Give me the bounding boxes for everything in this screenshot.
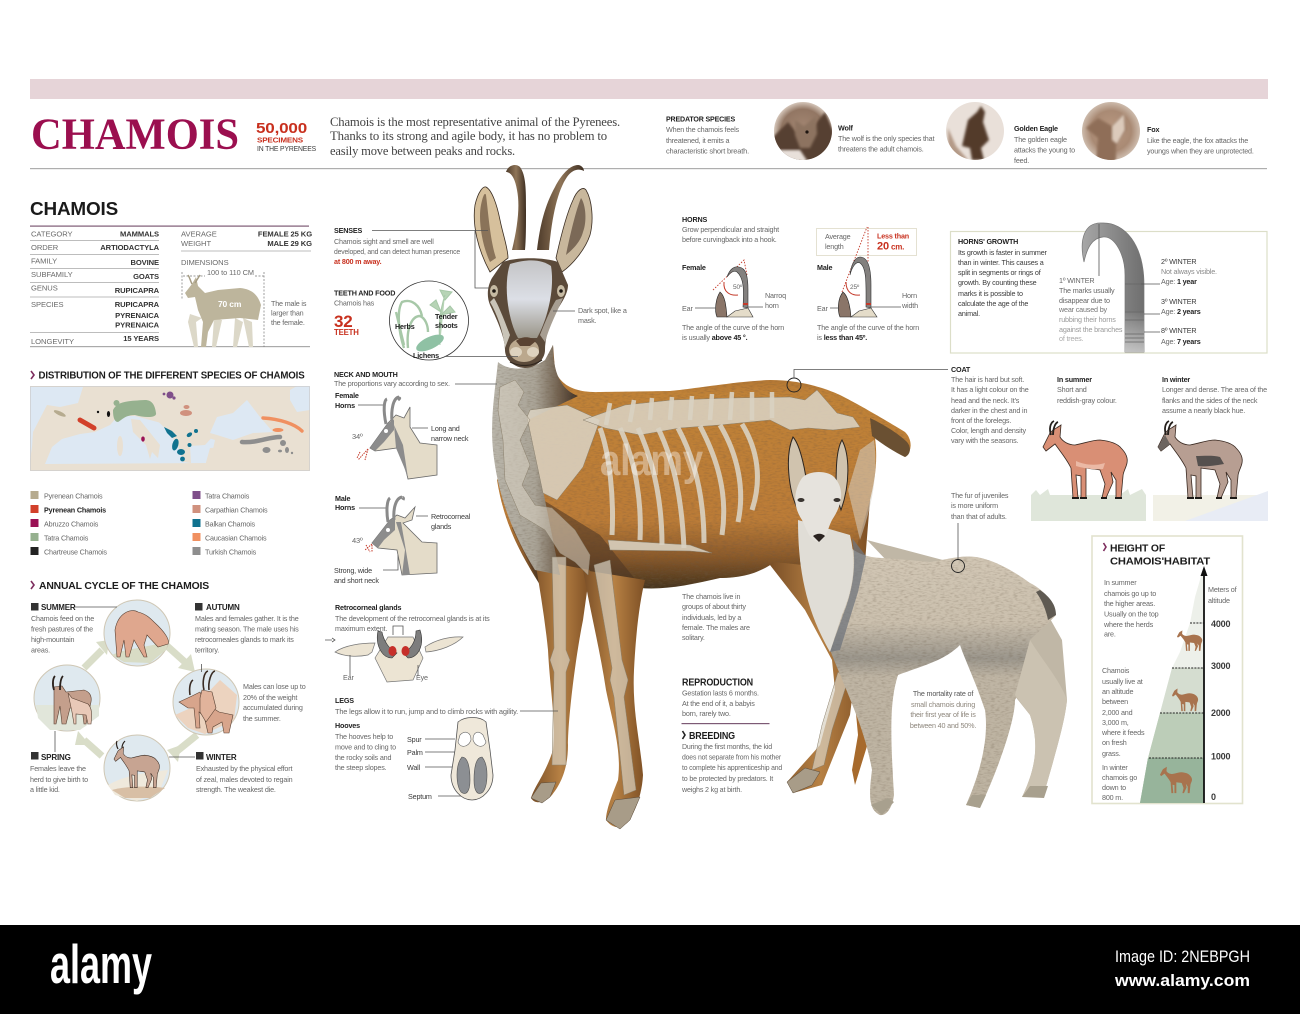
head (488, 258, 568, 368)
horns' growth panel: 1º WINTER (1059, 276, 1094, 285)
coat: summer: Short and (1057, 385, 1087, 394)
classification table: 15 YEARS (123, 334, 159, 343)
classification table: CATEGORY (31, 230, 73, 238)
text: reproduction (682, 678, 770, 724)
horns' growth panel: wear caused by (1058, 305, 1108, 314)
male horn diagram: Male (817, 263, 832, 272)
text: breeding: does not separate from his mother (682, 752, 782, 762)
predator: wolf: The wolf is the only species that (838, 134, 934, 143)
cycle: spring: herd to give birth to (30, 775, 88, 784)
predator species intro: When the chamois feels (666, 125, 740, 134)
predator: wolf: Wolf (838, 124, 854, 132)
callout: coat: Color, length and density (951, 426, 1026, 435)
coat: winter: In winter (1162, 375, 1190, 384)
cycle: autumn: Males and females gather. It is the (195, 614, 299, 623)
classification table: PYRENAICA (115, 311, 160, 320)
skeleton (498, 380, 860, 795)
male head diagram: 43º (352, 536, 363, 545)
habitat height panel: 3,000 m, (1102, 718, 1129, 727)
predator: wolf (774, 102, 934, 160)
predator: fox: Like the eagle, the fox attacks the (1147, 136, 1248, 145)
male head diagram: and short neck (334, 576, 379, 585)
mountain chart (1140, 566, 1237, 803)
footer bar (0, 925, 1300, 1014)
habitat height panel: usually live at (1102, 677, 1143, 686)
female horn diagram (682, 260, 786, 342)
coat: winter: assume a nearly black hue. (1162, 406, 1245, 415)
habitat height panel: chamois go up to (1104, 589, 1156, 598)
male horn diagram: width (901, 301, 918, 310)
torso (497, 345, 911, 588)
habitat height panel: In summer (1104, 578, 1137, 587)
cycle: autumn: territory. (195, 646, 219, 654)
female horn diagram: Female (682, 263, 706, 272)
male head diagram: glands (431, 522, 452, 531)
horns' growth panel: Its growth is faster in summer (958, 248, 1048, 257)
predator: golden eagle: feed. (1014, 156, 1029, 165)
habitat height panel: an altitude (1102, 687, 1133, 696)
chest shadow (512, 495, 642, 588)
male head diagram (334, 494, 471, 585)
female horn diagram: The angle of the curve of the horn (682, 323, 784, 332)
habitat height panel: are. (1104, 630, 1116, 638)
cycle: spring (30, 665, 100, 794)
neck (492, 345, 578, 575)
callout: neck and mouth (334, 370, 497, 388)
predator species intro: characteristic short breath. (666, 146, 749, 156)
cycle: autumn: 20% of the weight (243, 693, 297, 702)
callout: coat: head and the neck. It's (951, 396, 1020, 405)
predator: fox: youngs when they are unprotected. (1147, 146, 1254, 156)
male horn diagram: Ear (817, 304, 828, 313)
cycle: summer: areas. (31, 646, 50, 654)
text: herds: individuals, led by a (682, 613, 741, 622)
map legend: Chartreuse Chamois (44, 548, 107, 556)
kid tail (1036, 590, 1056, 620)
male horn diagram: is less than 45º. (817, 333, 867, 342)
coat: summer (1031, 375, 1146, 521)
horns' growth panel: animal. (958, 309, 980, 318)
male horn diagram: Horn (902, 291, 917, 300)
male head diagram: Horns (335, 503, 355, 512)
callout: legs: LEGS (335, 696, 354, 705)
male horn diagram (816, 227, 919, 342)
horns' growth panel: disappear due to (1059, 296, 1110, 305)
callout: hooves: the rocky soils and (335, 753, 391, 762)
classification table: ARTIODACTYLA (100, 243, 160, 252)
callout: dark spot (553, 306, 627, 325)
hooves (531, 768, 820, 829)
retrocorneal glands diagram: Eye (416, 673, 428, 682)
horns' growth panel: of trees. (1059, 334, 1084, 343)
callout: coat: The hair is hard but soft. (951, 375, 1024, 384)
kid rear hooves (871, 786, 1048, 815)
male horn diagram: 20 cm. (877, 240, 904, 252)
male horn diagram: Average (825, 232, 851, 241)
cycle: spring: a little kid. (30, 785, 60, 794)
callout: teeth and food: Chamois has (334, 298, 375, 308)
callout: hooves: Hooves (335, 721, 360, 730)
callout: juvenile fur: than that of adults. (951, 512, 1007, 521)
horns' growth panel: 3º WINTER (1161, 297, 1196, 306)
female horn diagram: is usually above 45 °. (682, 333, 748, 342)
callout: coat: It has a light colour on the (951, 385, 1029, 394)
callout: coat: front of the forelegs. (951, 416, 1011, 425)
map legend: Tatra Chamois (205, 492, 250, 500)
cycle: autumn: mating season. The male uses his (195, 624, 299, 634)
classification table: FEMALE 25 KG (258, 230, 312, 238)
habitat height panel: where the herds (1103, 620, 1154, 629)
cycle: summer: Chamois feed on the (31, 614, 94, 623)
illustration: adult chamois (474, 165, 911, 829)
classification table: SPECIES (31, 300, 64, 309)
title: CHAMOIS (31, 110, 239, 158)
cycle: summer: fresh pastures of the (31, 624, 93, 634)
kid head (788, 437, 848, 542)
callout: hooves: Septum (408, 792, 432, 801)
top band (30, 79, 1268, 99)
horns' growth panel: The marks usually (1059, 286, 1115, 295)
text: mortality: small chamois during (911, 700, 975, 709)
cycle: winter (104, 735, 293, 801)
coat: summer: reddish-gray colour. (1057, 396, 1117, 405)
female head diagram: Female (335, 391, 359, 400)
callout: teeth and food: TEETH (334, 328, 359, 337)
dimensions diagram: the female. (271, 318, 305, 327)
callout: legs (335, 696, 558, 716)
male horn diagram: length (825, 242, 844, 251)
classification table: AVERAGE (181, 230, 217, 238)
tail (870, 418, 910, 457)
footer bar: alamy (50, 933, 152, 995)
habitat height panel: HEIGHT OF (1110, 542, 1166, 554)
female head diagram: 34º (352, 432, 363, 441)
annual cycle heading: ANNUAL CYCLE OF THE CHAMOIS (39, 580, 209, 592)
population stat: SPECIMENS (257, 136, 303, 144)
callout: teeth and food: Lichens (413, 351, 439, 360)
cycle: autumn: the summer. (243, 714, 281, 723)
cycle: spring: SPRING (41, 753, 71, 762)
habitat height panel: CHAMOIS'HABITAT (1110, 556, 1211, 568)
population stat: 50,000 (256, 120, 307, 137)
cycle: autumn: retrocorneales glands to mark its (195, 635, 294, 644)
horns panel (682, 215, 779, 244)
map legend: Tatra Chamois (44, 534, 89, 542)
predator: fox: Fox (1147, 125, 1159, 134)
callout: hooves: The hooves help to (335, 732, 393, 741)
habitat height panel: Chamois (1102, 666, 1130, 675)
horns' growth panel: HORNS' GROWTH (958, 237, 1018, 246)
habitat height panel: 800 m. (1102, 793, 1123, 802)
callout: hooves: Spur (407, 735, 422, 744)
horns' growth panel: marks it is possible to (958, 289, 1023, 298)
callout: hooves: Wall (407, 763, 421, 772)
horns' growth panel: rubbing their horns (1059, 315, 1116, 324)
female horn diagram: 50º (733, 284, 743, 291)
habitat height panel: the higher areas. (1104, 599, 1155, 608)
classification table (30, 226, 312, 347)
male horn diagram: Less than (877, 232, 909, 240)
dimensions diagram: larger than (271, 308, 304, 318)
callout: senses: at 800 m away. (334, 257, 382, 266)
predator: golden eagle: attacks the young to (1014, 146, 1075, 154)
population stat: IN THE PYRENEES (257, 144, 316, 153)
cycle: summer (31, 600, 170, 666)
habitat height panel: on fresh (1102, 738, 1127, 747)
footer bar: Image ID: 2NEBPGH (1115, 947, 1250, 966)
retrocorneal glands diagram: Ear (343, 673, 354, 682)
dimensions diagram: DIMENSIONS (181, 258, 229, 267)
map legend: Pyrenean Chamois (44, 492, 103, 500)
female head diagram (335, 391, 469, 479)
ears (474, 187, 592, 272)
cycle: winter: of zeal, males devoted to regain (196, 775, 293, 784)
text: reproduction: born, rarely two. (682, 709, 731, 718)
coat: winter (1153, 375, 1268, 521)
callout: neck and mouth: NECK AND MOUTH (334, 370, 398, 379)
habitat height panel: In winter (1102, 763, 1128, 772)
mountain chart: 3000 (1211, 661, 1231, 671)
cycle: autumn: accumulated during (243, 703, 303, 712)
horns panel: before curvingback into a hook. (682, 235, 777, 244)
predator species intro (666, 114, 749, 156)
classification table: GOATS (133, 272, 159, 281)
habitat height panel: where it feeds (1101, 728, 1145, 737)
text: breeding (681, 731, 782, 794)
habitat height panel: between (1102, 697, 1128, 706)
text: mortality: between 40 and 50%. (910, 721, 976, 730)
callout: hooves: Palm (407, 748, 423, 757)
classification table: RUPICAPRA (115, 300, 160, 309)
mountain chart: altitude (1208, 596, 1230, 605)
cycle: autumn: Males can lose up to (243, 682, 306, 691)
horns panel: HORNS (682, 215, 707, 224)
header rule (30, 168, 1267, 169)
callout: coat: vary with the seasons. (951, 436, 1019, 445)
text: breeding: BREEDING (689, 731, 735, 742)
female head diagram: Long and (431, 424, 460, 433)
horns' growth panel: against the branches (1059, 325, 1123, 334)
mountain chart: 4000 (1211, 619, 1231, 629)
habitat height panel (1092, 536, 1242, 804)
classification table: ORDER (31, 243, 59, 252)
cycle: summer: SUMMER (41, 603, 76, 612)
text: reproduction: Gestation lasts 6 months. (682, 688, 759, 698)
intro text: Chamois is the most representative animal of the Pyrenees. (330, 115, 620, 129)
horns' growth panel: than in winter. This causes a (958, 258, 1044, 267)
horns' growth panel: Age: 2 years (1161, 307, 1201, 316)
male head diagram: Male (335, 494, 350, 503)
front legs (531, 560, 590, 802)
callout: teeth and food (334, 281, 518, 360)
horns' growth panel: growth. By counting these (958, 278, 1037, 287)
text: breeding: During the first months, the kid (682, 742, 772, 751)
coat: summer: In summer (1057, 375, 1092, 384)
classification table: MAMMALS (120, 230, 159, 238)
footer bar: www.alamy.com (1114, 971, 1250, 990)
map legend: Caucasian Chamois (205, 534, 267, 542)
predator species intro: threatened, it emits a (666, 136, 730, 145)
callout: juvenile fur: is more uniform (951, 501, 998, 510)
cycle: winter: strength. The weakest die. (196, 785, 276, 794)
habitat height panel: down to (1102, 783, 1126, 792)
retrocorneal glands diagram: Retrocorneal glands (335, 603, 401, 612)
text: breeding: to complete his apprenticeship and (682, 763, 782, 772)
male head diagram: Strong, wide (334, 566, 372, 575)
horns' growth panel: Not always visible. (1161, 267, 1217, 276)
callout: teeth and food: Herbs (395, 322, 415, 331)
classification table: RUPICAPRA (115, 286, 160, 295)
text: herds: female. The males are (682, 623, 750, 632)
cycle: winter: Exhausted by the physical effort (196, 764, 292, 773)
female horn diagram: Narroq (765, 291, 786, 300)
distribution map (30, 386, 310, 471)
mountain chart: 1000 (1211, 752, 1231, 762)
horns' growth panel: calculate the age of the (958, 299, 1028, 308)
horns' growth panel: 8º WINTER (1161, 326, 1196, 335)
horns (506, 165, 584, 250)
classification table: SUBFAMILY (31, 270, 73, 279)
map legend: Balkan Chamois (205, 520, 256, 528)
map legend: Abruzzo Chamois (44, 520, 99, 528)
cycle: summer: high-mountain (31, 635, 75, 644)
text: breeding: weighs 2 kg at birth. (681, 785, 742, 794)
predator: golden eagle (946, 102, 1075, 165)
dimensions diagram: 100 to 110 CM (207, 268, 254, 277)
dimensions diagram (181, 258, 307, 347)
retrocorneal glands diagram (325, 603, 490, 682)
dimensions diagram: 70 cm (218, 299, 242, 309)
retrocorneal glands diagram: The development of the retrocorneal glands is at its (335, 614, 490, 623)
callout: teeth and food: 32 (334, 312, 353, 331)
callout: coat: COAT (951, 365, 971, 374)
callout: neck and mouth: The proportions vary according to sex. (334, 379, 450, 388)
predator species intro: PREDATOR SPECIES (666, 114, 735, 124)
watermark: alamy (600, 436, 704, 485)
text: reproduction: REPRODUCTION (682, 678, 753, 688)
callout: hooves (335, 718, 493, 801)
callout: coat: darker in the chest and in (951, 406, 1027, 415)
classification table: FAMILY (31, 256, 57, 266)
male horn diagram: The angle of the curve of the horn (817, 323, 919, 332)
predator: golden eagle: The golden eagle (1014, 135, 1067, 144)
habitat height panel: chamois go (1102, 773, 1137, 782)
intro text: Thanks to its strong and agile body, it has no problem to (330, 129, 607, 143)
classification table: BOVINE (130, 258, 159, 267)
map legend: Carpathian Chamois (205, 506, 268, 514)
text: mortality: The mortality rate of (913, 689, 973, 698)
text: herds: groups of about thirty (682, 602, 746, 611)
callout: teeth and food: shoots (435, 321, 458, 330)
callout: hooves: the steep slopes. (335, 763, 387, 772)
horns' growth panel: Age: 1 year (1161, 277, 1197, 286)
section heading: chamois: CHAMOIS (30, 199, 118, 219)
coat: winter: flanks and the sides of the neck (1162, 396, 1258, 405)
text: breeding: to be protected by predators. It (682, 774, 773, 783)
callout: dark spot: Dark spot, like a (578, 306, 627, 315)
callout: teeth and food: Tender (435, 312, 458, 321)
classification table: PYRENAICA (115, 320, 160, 330)
male horn diagram: 25º (850, 284, 860, 291)
cycle: autumn: AUTUMN (206, 603, 240, 612)
callout: legs: The legs allow it to run, jump and to climb rocks with agility. (335, 707, 518, 716)
callout: senses: Chamois sight and smell are well (334, 237, 434, 246)
callout: juvenile fur: The fur of juveniles (951, 491, 1009, 500)
text: herds: solitary. (682, 633, 705, 642)
callout: senses: developed, and can detect human presence (334, 247, 460, 256)
map legend: Turkish Chamois (205, 548, 257, 556)
mountain chart: Meters of (1208, 585, 1237, 594)
text: mortality: their first year of life is (910, 710, 976, 719)
text: herds: The chamois live in (682, 592, 740, 601)
horns panel: Grow perpendicular and straight (682, 225, 779, 234)
map legend: Pyrenean Chamois (44, 506, 106, 514)
classification table: MALE 29 KG (267, 239, 312, 248)
horns' growth panel: split in segments or rings of (958, 268, 1041, 277)
population stat (256, 120, 316, 153)
male head diagram: Retrocorneal (431, 512, 471, 521)
map legend (30, 491, 268, 556)
horns' growth panel: Age: 7 years (1161, 337, 1201, 346)
rump hair (848, 440, 875, 540)
text: reproduction: At the end of it, a babyis (682, 699, 755, 708)
callout: juvenile fur (951, 491, 1009, 572)
callout: hooves: move and to cling to (335, 742, 396, 752)
retrocorneal glands diagram: maximum extent. (335, 624, 387, 633)
classification table: LONGEVITY (31, 337, 74, 346)
classification table: GENUS (31, 284, 58, 292)
cycle: autumn (173, 603, 306, 735)
habitat height panel: 2,000 and (1102, 708, 1133, 717)
illustration: kid chamois (788, 437, 1067, 815)
classification table: WEIGHT (181, 239, 211, 248)
intro text (330, 115, 620, 158)
callout: senses (334, 226, 489, 288)
callout: teeth and food: TEETH AND FOOD (334, 288, 395, 298)
cycle arrows (75, 640, 197, 762)
rear legs (851, 640, 872, 785)
female horn diagram: horn (765, 301, 779, 310)
text: mortality (910, 689, 976, 730)
coat: winter: Longer and dense. The area of the (1162, 385, 1267, 394)
text: herds (682, 592, 750, 642)
callout: senses: SENSES (334, 226, 363, 235)
intro text: easily move between peaks and rocks. (330, 144, 515, 158)
callout: coat (787, 365, 1029, 445)
cycle: winter: WINTER (206, 753, 237, 762)
habitat height panel: grass. (1102, 749, 1121, 758)
distribution heading: DISTRIBUTION OF THE DIFFERENT SPECIES OF CHAMOIS (38, 370, 305, 382)
horns' growth panel (950, 223, 1267, 353)
callout: dark spot: mask. (578, 316, 596, 325)
habitat height panel: Usually on the top (1104, 610, 1159, 618)
horns' growth panel: 2º WINTER (1161, 257, 1196, 266)
mountain chart: 2000 (1211, 708, 1231, 718)
female head diagram: narrow neck (431, 434, 469, 443)
female horn diagram: Ear (682, 304, 693, 313)
mountain chart: 0 (1211, 792, 1216, 802)
female head diagram: Horns (335, 401, 355, 410)
ribs (600, 392, 772, 548)
predator: golden eagle: Golden Eagle (1014, 124, 1058, 133)
dimensions diagram: The male is (271, 299, 307, 308)
predator: wolf: threatens the adult chamois. (838, 144, 924, 154)
predator: fox (1082, 102, 1254, 162)
cycle: spring: Females leave the (30, 764, 86, 773)
